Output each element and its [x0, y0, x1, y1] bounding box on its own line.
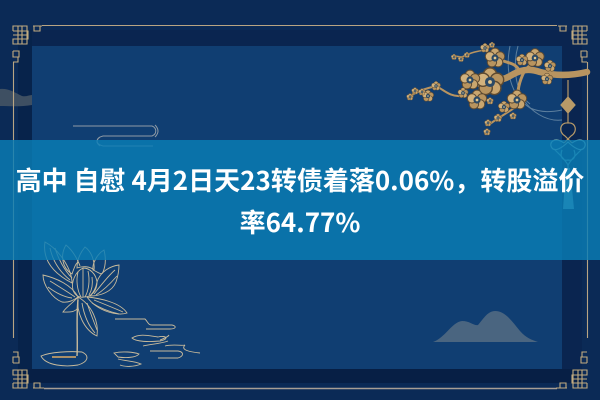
title text: 高中 自慰 4月2日天23转债着落0.06%，转股溢价 — [16, 161, 584, 198]
lotus — [41, 242, 200, 366]
corner knot top right — [558, 26, 587, 62]
title band — [0, 140, 600, 260]
title text: 率64.77% — [240, 203, 360, 240]
corner knot bottom left — [13, 352, 44, 388]
cloud lines — [73, 125, 158, 146]
inner panel — [32, 46, 562, 369]
corner knot top left — [13, 26, 42, 62]
mountain — [433, 311, 538, 342]
left grey strip — [0, 89, 32, 106]
pale arcs — [508, 46, 562, 120]
title text — [16, 161, 584, 240]
plum branch — [407, 42, 587, 135]
hanging knot and tassel — [551, 80, 585, 209]
corner knot bottom right — [556, 352, 587, 388]
